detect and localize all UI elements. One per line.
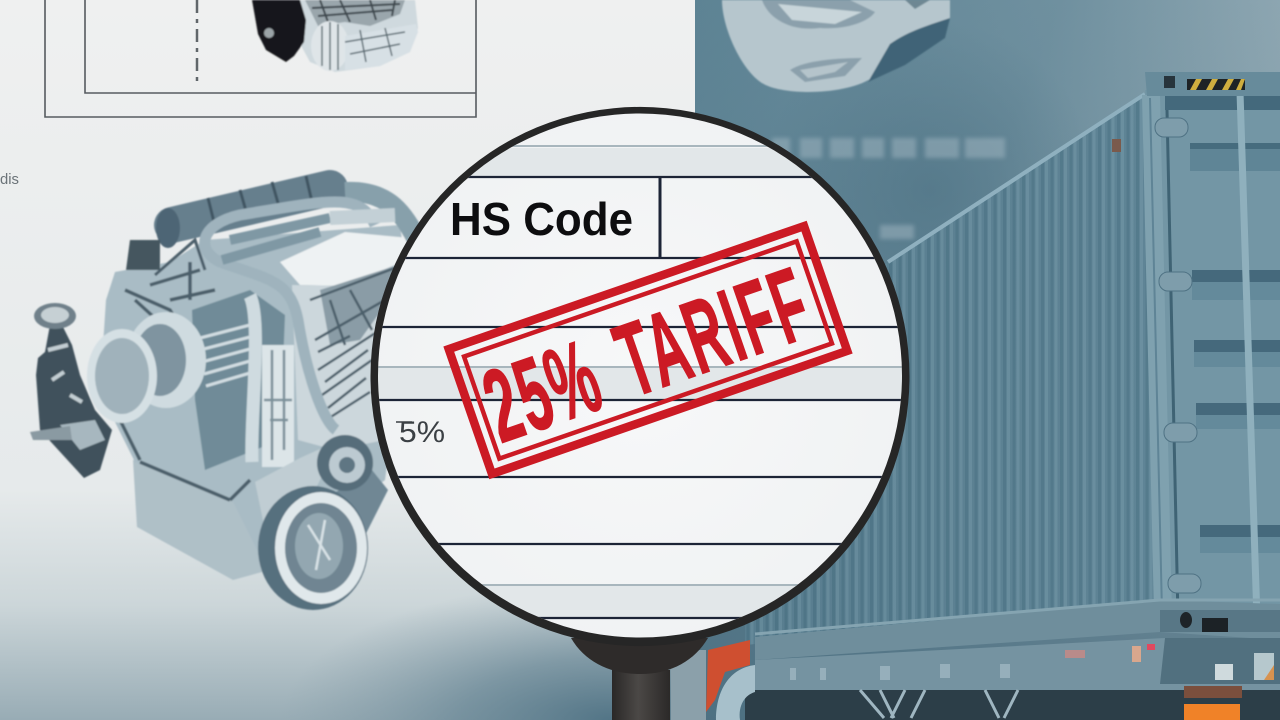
engine: sump (133, 460, 300, 580)
container: bottom rail (755, 600, 1280, 660)
handle: collar (571, 638, 708, 674)
engine: top manifold (172, 188, 330, 225)
illustration: car front (722, 0, 950, 92)
table: 5% value (396, 421, 444, 442)
chassis: tail markers (1065, 644, 1274, 680)
chassis: wheel arch (716, 665, 755, 720)
container: hazard stripes (1187, 79, 1245, 90)
container: door face (1145, 90, 1280, 632)
lens: glass (377, 112, 903, 638)
chassis: dark underside (745, 690, 1280, 720)
lens: rim (370, 107, 909, 646)
magnifying glass (370, 107, 910, 720)
engine: left bracket (36, 325, 112, 478)
label: partial text: dis (0, 171, 19, 188)
table: 5% value: 5% (399, 416, 445, 449)
chassis: red cab (706, 640, 750, 712)
chassis: orange bumper block (1184, 686, 1242, 720)
container: recessed door bands (1165, 96, 1280, 553)
table: light rules (370, 146, 910, 585)
engine: large pulley (258, 486, 368, 610)
container: lock rod (1240, 92, 1257, 620)
container: top rail (888, 94, 1145, 262)
container: corner post (1142, 95, 1172, 615)
truck chassis (706, 638, 1280, 720)
stamp: 25% tariff: TARIFF (603, 246, 825, 419)
left background (0, 0, 700, 720)
right background panel (671, 0, 1280, 720)
container: top corner (1145, 72, 1280, 96)
shipping container (740, 72, 1280, 660)
blurred background text (772, 138, 1005, 239)
handle: stem (612, 670, 670, 720)
engine: hoses (205, 202, 375, 430)
engine: fan block (192, 290, 285, 470)
container: door lugs (1155, 118, 1201, 593)
table: HS Code header: HS Code (450, 193, 633, 245)
lens: table contents (370, 146, 910, 618)
chassis: beam markers (790, 664, 1010, 680)
engine: front pulleys (126, 312, 206, 408)
chassis: beam (755, 638, 1280, 692)
stamp: 25% tariff (449, 226, 847, 474)
chassis: support struts (860, 690, 1018, 718)
table: dark rules (370, 177, 910, 618)
illustration: large engine (30, 176, 416, 610)
table: shaded bands (370, 148, 910, 618)
icon: small engine in document (252, 0, 418, 72)
document frame: top left (45, 0, 476, 117)
container: corrugated side (740, 90, 1165, 650)
engine: top detail scribbles (100, 262, 250, 500)
engine: main block (100, 225, 410, 560)
engine: belt (290, 470, 388, 575)
engine: right cover (280, 232, 410, 286)
container: rust mark (1112, 139, 1121, 152)
stamp: 25% tariff: 25% (470, 317, 616, 465)
engine: small pulley (317, 435, 373, 491)
